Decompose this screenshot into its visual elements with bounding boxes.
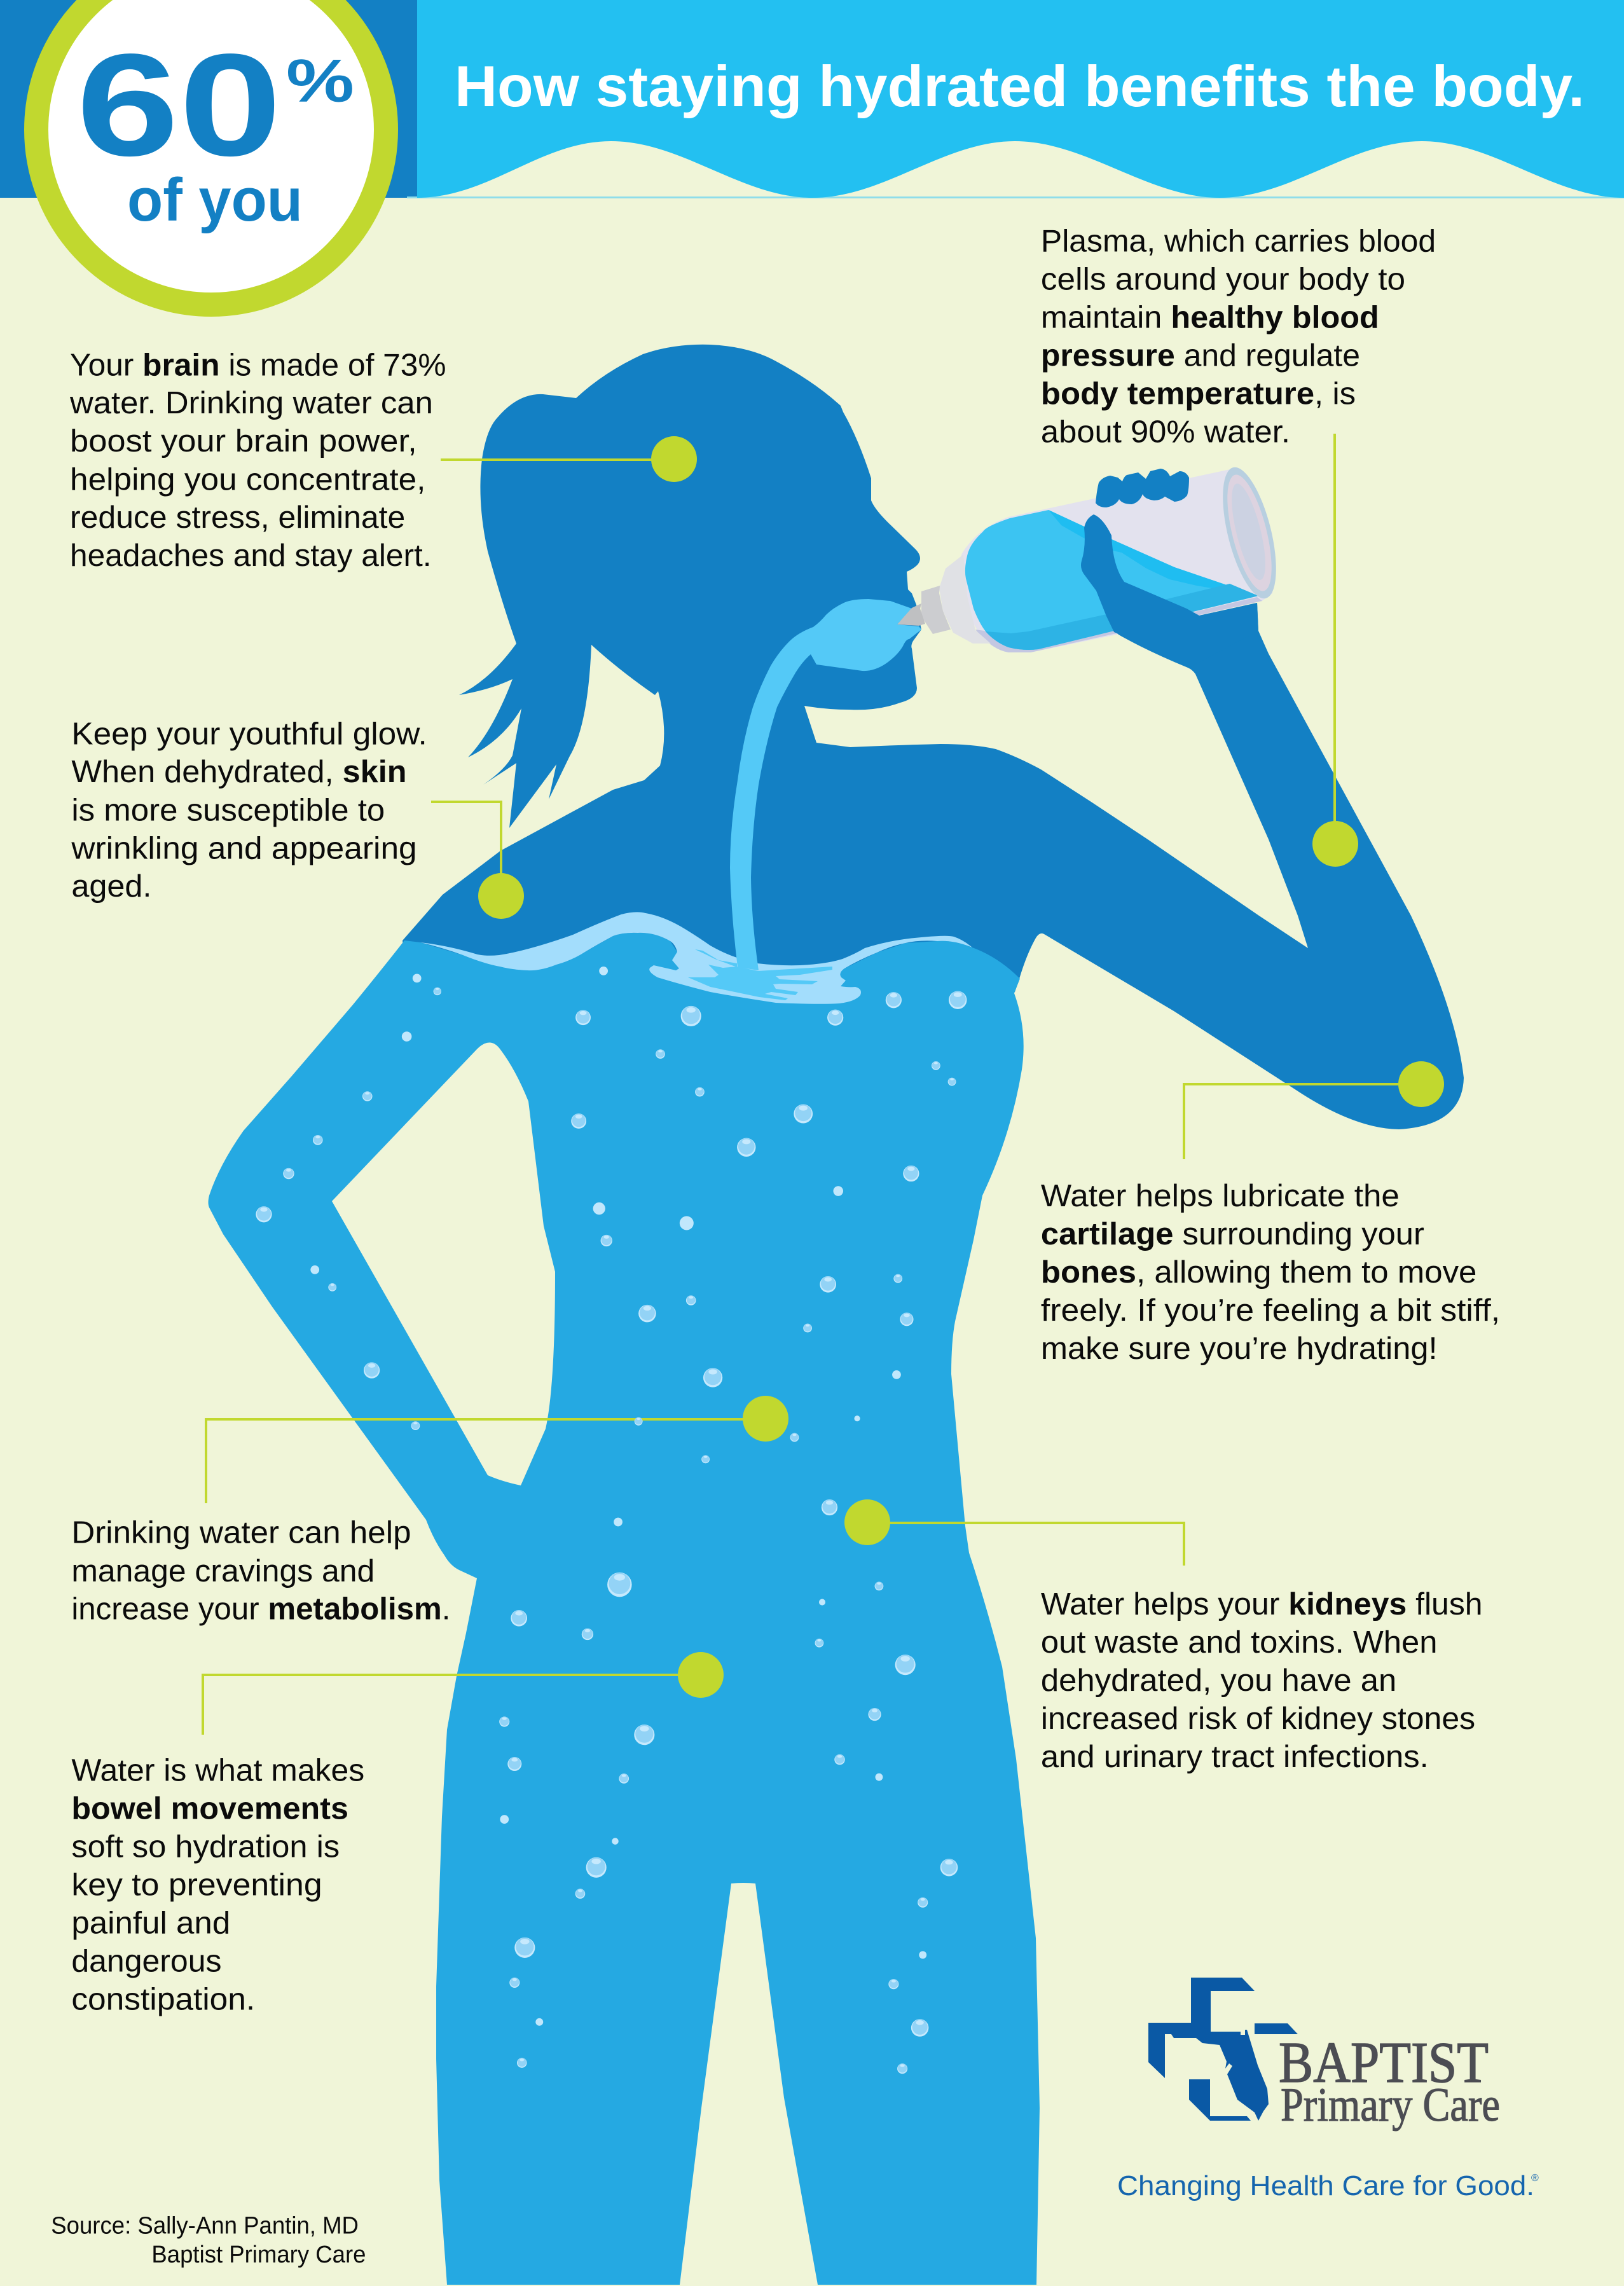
tagline: ® xyxy=(1531,2173,1539,2184)
badge: 60% of you xyxy=(36,0,386,305)
text: brain: reduce stress, eliminate xyxy=(70,500,405,535)
text: kidneys: dehydrated, you have an xyxy=(1041,1663,1396,1698)
header banner xyxy=(0,0,1624,198)
badge: 60% of you: 60 xyxy=(76,24,282,186)
source note: Source: Sally-Ann Pantin, MD xyxy=(51,2212,359,2239)
text: kidneys: and urinary tract infections. xyxy=(1041,1740,1429,1774)
callout dots xyxy=(478,436,1444,1698)
body silhouette: head, shoulders and raised arm xyxy=(403,345,1464,1129)
text: plasma: Plasma, which carries blood xyxy=(1041,224,1436,258)
badge: 60% of you: of you xyxy=(127,166,303,234)
text: plasma: body temperature , is xyxy=(1041,376,1356,411)
badge: 60% of you: % xyxy=(286,47,354,115)
water bottle xyxy=(921,462,1287,652)
title: How staying hydrated benefits the body. xyxy=(455,55,1585,119)
text: skin xyxy=(71,717,427,904)
fingers xyxy=(1096,469,1189,507)
text: cartilage: make sure you’re hydrating! xyxy=(1041,1332,1438,1366)
text: metabolism: Drinking water can help xyxy=(71,1516,411,1550)
text: metabolism xyxy=(71,1516,450,1627)
text: brain: Your brain is made of 73% xyxy=(70,348,446,382)
text: plasma: maintain healthy blood xyxy=(1041,300,1379,334)
text: cartilage: bones , allowing them to move xyxy=(1041,1255,1476,1290)
source note xyxy=(51,2212,366,2268)
callout lines xyxy=(203,434,1421,1735)
water in mouth and stream down the throat xyxy=(730,599,921,970)
text: kidneys: Water helps your kidneys flush xyxy=(1041,1587,1483,1622)
text: kidneys: increased risk of kidney stones xyxy=(1041,1702,1475,1736)
text: bowel: dangerous xyxy=(71,1944,221,1978)
text: bowel xyxy=(71,1753,364,2016)
text: brain xyxy=(69,348,446,573)
text: bowel: key to preventing xyxy=(71,1868,322,1902)
text: kidneys: out waste and toxins. When xyxy=(1041,1625,1438,1660)
text: kidneys xyxy=(1041,1587,1483,1774)
logo: Baptist Primary Care: BAPTIST xyxy=(1279,2030,1489,2095)
text: skin: is more susceptible to xyxy=(71,793,385,827)
bubbles xyxy=(256,967,967,2074)
text: bowel: painful and xyxy=(71,1906,230,1940)
body silhouette: torso filled with water xyxy=(209,933,1040,2285)
text: bowel: Water is what makes xyxy=(71,1753,364,1787)
text: metabolism: manage cravings and xyxy=(71,1554,375,1588)
text: skin: wrinkling and appearing xyxy=(71,831,417,865)
source note: Baptist Primary Care xyxy=(151,2241,366,2268)
text: bowel: soft so hydration is xyxy=(71,1829,340,1864)
nozzle xyxy=(897,603,925,626)
hand on bottle xyxy=(1081,514,1258,668)
text: cartilage xyxy=(1041,1179,1500,1366)
water surface wave xyxy=(420,912,972,1004)
text: brain: headaches and stay alert. xyxy=(70,539,432,573)
text: brain: helping you concentrate, xyxy=(70,462,425,497)
text: plasma: pressure and regulate xyxy=(1041,338,1360,373)
tagline: Changing Health Care for Good. xyxy=(1117,2170,1534,2201)
text: plasma: cells around your body to xyxy=(1041,262,1405,296)
text: metabolism: increase your metabolism. xyxy=(71,1592,450,1627)
text: brain: boost your brain power, xyxy=(70,424,417,458)
text: cartilage: cartilage surrounding your xyxy=(1041,1217,1424,1251)
text: bowel: constipation. xyxy=(71,1982,255,2016)
logo: Baptist Primary Care: Primary Care xyxy=(1281,2079,1500,2131)
text: cartilage: freely. If you’re feeling a bit stiff, xyxy=(1041,1293,1500,1328)
logo: Baptist Primary Care xyxy=(1148,1978,1500,2131)
text: plasma: about 90% water. xyxy=(1041,415,1290,449)
text: skin: aged. xyxy=(71,869,151,904)
text: brain: water. Drinking water can xyxy=(69,386,433,420)
text: cartilage: Water helps lubricate the xyxy=(1041,1179,1400,1213)
text: skin: Keep your youthful glow. xyxy=(71,717,427,751)
text: skin: When dehydrated, skin xyxy=(71,755,407,789)
text: bowel: bowel movements xyxy=(71,1791,348,1826)
text: plasma xyxy=(1041,224,1436,449)
